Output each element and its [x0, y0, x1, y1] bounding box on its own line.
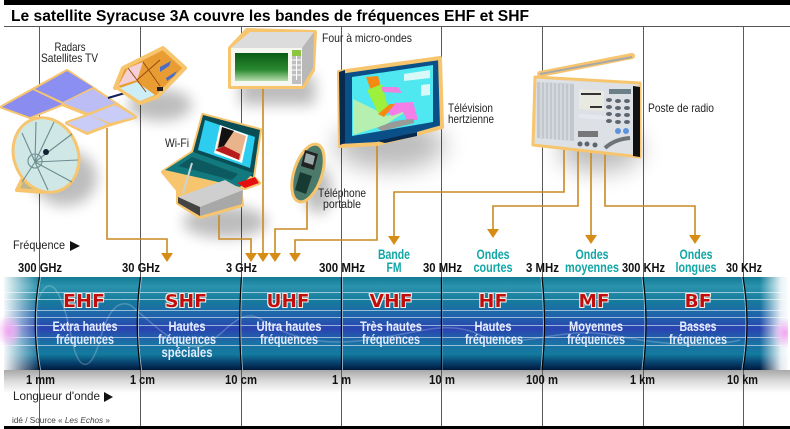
frequency scale: 30 KHz — [726, 260, 762, 275]
wavelength scale: 10 cm — [225, 372, 257, 387]
frequency scale: 300 GHz — [18, 260, 62, 275]
frequency scale: 30 MHz — [423, 260, 462, 275]
shadow under spectrum band — [4, 370, 790, 393]
band names: MF — [578, 291, 610, 312]
band names: EHF — [63, 291, 105, 312]
band descriptions: fréquences — [260, 332, 318, 347]
label: television hertzienne: Télévision — [448, 101, 493, 115]
label: longueur d'onde: Longueur d'onde — [13, 389, 100, 403]
radio band labels: moyennes — [565, 260, 619, 275]
radio band labels: Ondes — [576, 247, 608, 262]
label: radars satellites — [41, 40, 98, 65]
band descriptions: spéciales — [162, 345, 212, 360]
band names — [63, 291, 712, 312]
radio band labels: FM — [386, 260, 402, 275]
band descriptions: Hautes — [474, 319, 512, 334]
band descriptions: fréquences — [158, 332, 216, 347]
band names: UHF — [266, 291, 310, 312]
label: television hertzienne: hertzienne — [448, 112, 494, 126]
band names: HF — [478, 291, 508, 312]
label: television hertzienne — [448, 101, 494, 126]
band descriptions: fréquences — [567, 332, 625, 347]
title: Le satellite Syracuse 3A couvre les bandes de fréquences EHF et SHF — [11, 8, 529, 25]
frequency scale — [18, 260, 762, 275]
band descriptions: fréquences — [362, 332, 420, 347]
wavelength scale: 10 m — [429, 372, 455, 387]
icon: microwave — [230, 30, 315, 87]
icon: laptop and router — [163, 115, 260, 217]
wavelength scale: 10 km — [727, 372, 758, 387]
band descriptions: Extra hautes — [52, 319, 118, 334]
band descriptions: Basses — [680, 319, 716, 334]
radio band labels — [378, 247, 716, 275]
label: radars satellites: Satellites TV — [41, 51, 98, 65]
frequency scale: 300 KHz — [622, 260, 665, 275]
bottom black bar — [4, 426, 790, 429]
wavelength scale: 1 km — [630, 372, 655, 387]
wavelength scale — [26, 372, 758, 387]
frequency scale: 30 GHz — [122, 260, 160, 275]
frequency scale: 3 GHz — [226, 260, 257, 275]
orange connector lines — [107, 88, 701, 262]
band descriptions — [52, 319, 727, 360]
soft shadows behind illustrations — [33, 75, 642, 238]
label: telephone portable: portable — [323, 197, 361, 211]
label: poste de radio: Poste de radio — [648, 101, 714, 115]
radio band labels: Bande — [378, 247, 410, 262]
radio band labels: Ondes — [476, 247, 510, 262]
label: telephone portable: Téléphone — [318, 186, 366, 200]
icon: television — [339, 58, 442, 146]
wavelength scale: 1 mm — [26, 372, 55, 387]
radio band labels: longues — [676, 260, 716, 275]
band names: SHF — [165, 291, 207, 312]
icon: radio — [533, 56, 640, 157]
band names: VHF — [370, 291, 412, 312]
band descriptions: Très hautes — [360, 319, 422, 334]
band descriptions: fréquences — [56, 332, 114, 347]
band names: BF — [684, 291, 712, 312]
label: four a micro-ondes: Four à micro-ondes — [322, 31, 412, 45]
source credit: idé / Source « Les Echos » — [12, 416, 111, 425]
frequency scale: 300 MHz — [319, 260, 365, 275]
radio band labels: Ondes — [680, 247, 712, 262]
band descriptions: Moyennes — [569, 319, 623, 334]
band descriptions: fréquences — [669, 332, 727, 347]
label: wi-fi: Wi-Fi — [165, 136, 189, 150]
frequency scale: 3 MHz — [526, 260, 559, 275]
label: frequence: Fréquence — [13, 238, 65, 252]
band descriptions: Hautes — [168, 319, 206, 334]
band descriptions: fréquences — [465, 332, 523, 347]
icon: satellite — [2, 48, 185, 133]
wavelength scale: 1 cm — [130, 372, 155, 387]
label: telephone portable — [318, 186, 366, 211]
wavelength scale: 100 m — [526, 372, 558, 387]
top black bar — [4, 0, 790, 5]
wavelength scale: 1 m — [332, 372, 351, 387]
label: radars satellites: Radars — [54, 40, 86, 54]
band descriptions: Ultra hautes — [256, 319, 322, 334]
spectrum band — [0, 277, 790, 370]
icon: satellite dish — [2, 108, 90, 202]
radio band labels: courtes — [474, 260, 512, 275]
icon: mobile phone — [285, 140, 331, 206]
